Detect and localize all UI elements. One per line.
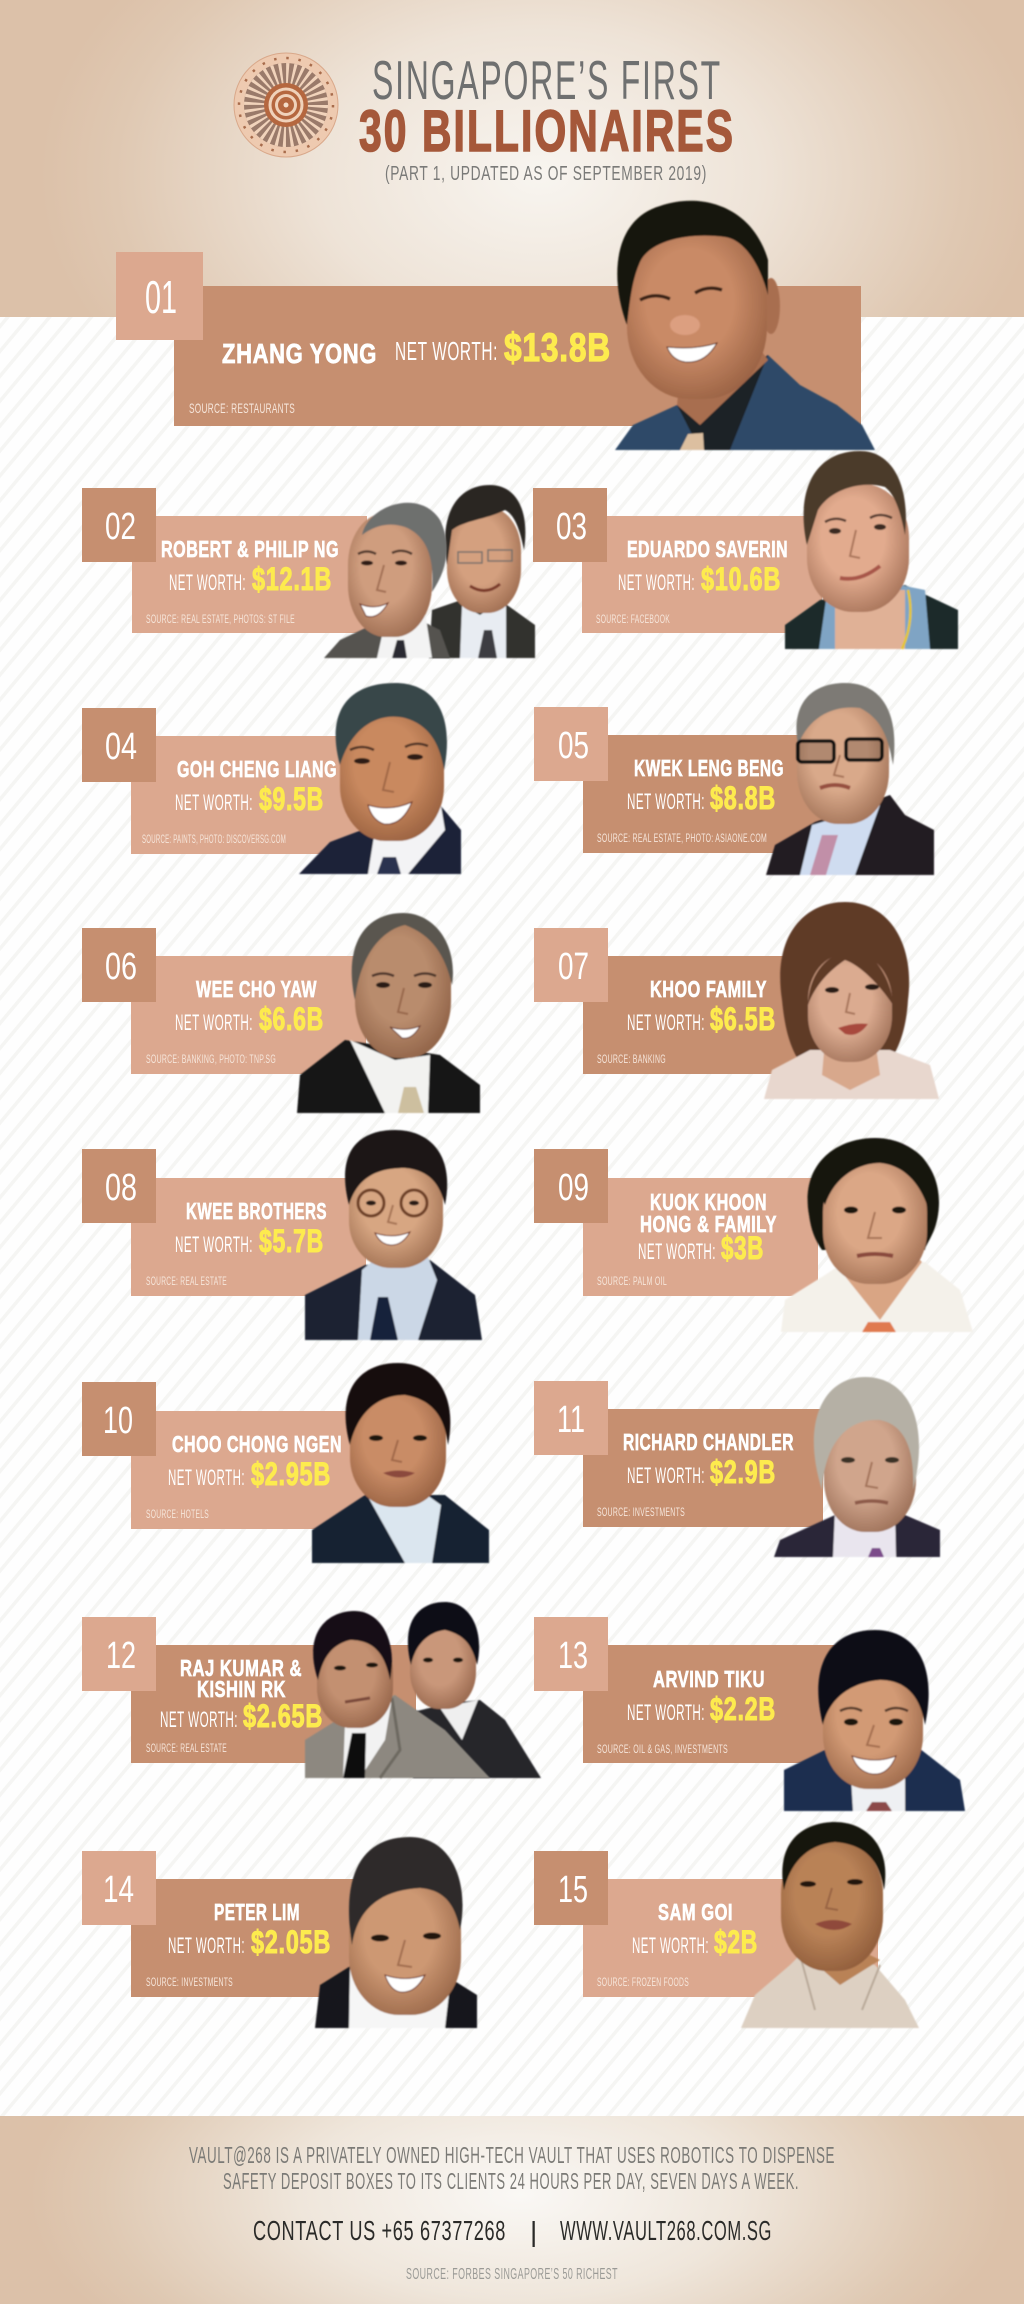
portrait: Arvind Tiku: [784, 1630, 965, 1811]
portrait: Richard Chandler: [774, 1377, 940, 1557]
portrait: Robert Ng: [324, 503, 450, 658]
source: SOURCE: REAL ESTATE: [146, 1741, 227, 1755]
source: SOURCE: RESTAURANTS: [189, 400, 295, 416]
card 01: Zhang Yong: [116, 201, 875, 450]
portrait: Kwek Leng Beng: [766, 683, 934, 875]
rank box 11: [534, 1381, 608, 1455]
rank box 02: [82, 488, 156, 562]
portrait: Goh Cheng Liang: [299, 683, 461, 874]
name: KWEE BROTHERS: [186, 1198, 327, 1224]
card 08: Kwee Brothers: [82, 1130, 482, 1340]
net worth amount: $2B: [714, 1924, 758, 1960]
source: SOURCE: BANKING, PHOTO: TNP.SG: [146, 1052, 276, 1066]
portrait: Kuok Khoon Hong: [781, 1138, 973, 1332]
net worth amount: $2.95B: [251, 1456, 331, 1492]
rank box 15: [534, 1851, 608, 1925]
rank box 14: [82, 1851, 156, 1925]
net worth amount: $2.9B: [710, 1454, 776, 1490]
net worth label: NET WORTH:: [160, 1707, 238, 1732]
net worth amount: $6.5B: [710, 1001, 776, 1037]
portrait: Philip Ng: [429, 485, 535, 658]
rank box 15: 15: [558, 1869, 588, 1911]
portrait: Zhang Yong: [615, 201, 875, 450]
rank box 12: 12: [106, 1635, 136, 1677]
net worth label: NET WORTH:: [627, 1010, 705, 1035]
net worth amount: $10.6B: [701, 561, 781, 597]
website: WWW.VAULT268.COM.SG: [560, 2215, 772, 2246]
footer panel: [0, 2116, 1024, 2304]
source: SOURCE: REAL ESTATE, PHOTO: ASIAONE.COM: [597, 831, 767, 845]
card 13: Arvind Tiku: [534, 1617, 965, 1811]
net worth amount: $2.05B: [251, 1924, 331, 1960]
portrait: Eduardo Saverin: [785, 451, 958, 649]
rank box 01: 01: [145, 271, 177, 323]
net worth label: NET WORTH:: [175, 1232, 253, 1257]
rank box 13: [534, 1617, 608, 1691]
footer description: [189, 2142, 835, 2194]
rank box 09: [534, 1149, 608, 1223]
card 14: Peter Lim: [82, 1837, 477, 2028]
net worth amount: $5.7B: [259, 1223, 324, 1259]
source: SOURCE: PALM OIL: [597, 1274, 667, 1288]
title line 1: SINGAPORE’S FIRST: [372, 49, 722, 111]
net worth label: NET WORTH:: [627, 1463, 705, 1488]
net worth label: NET WORTH:: [627, 1700, 705, 1725]
rank box 05: [534, 707, 608, 781]
name: [640, 1189, 777, 1237]
card 06: Wee Cho Yaw: [82, 913, 480, 1113]
rank box 04: [82, 708, 156, 782]
name: PETER LIM: [214, 1899, 300, 1925]
rank box 09: 09: [558, 1167, 589, 1209]
subtitle: (PART 1, UPDATED AS OF SEPTEMBER 2019): [385, 163, 707, 185]
net worth amount: $2.65B: [243, 1698, 323, 1734]
net worth amount: $9.5B: [259, 781, 324, 817]
name: SAM GOI: [658, 1899, 733, 1925]
source: SOURCE: FACEBOOK: [596, 612, 670, 626]
portrait: Choo Chong Ngen: [312, 1363, 489, 1563]
name: ZHANG YONG: [222, 338, 377, 369]
divider bar: |: [530, 2216, 537, 2247]
name: KISHIN RK: [197, 1676, 286, 1702]
name: RICHARD CHANDLER: [623, 1429, 794, 1455]
name: [180, 1655, 302, 1702]
portrait: Khoo Family: [764, 902, 939, 1099]
name: HONG & FAMILY: [640, 1211, 777, 1237]
rank box 08: 08: [105, 1167, 137, 1209]
card 03: Eduardo Saverin: [533, 451, 958, 649]
icon: vault door logo: [234, 53, 338, 157]
title line 2: 30 BILLIONAIRES: [359, 99, 735, 164]
rank box 03: [533, 488, 607, 562]
rank box 13: 13: [558, 1635, 588, 1677]
source: SOURCE: REAL ESTATE: [146, 1274, 227, 1288]
card 11: Richard Chandler: [534, 1377, 940, 1557]
name: KUOK KHOON: [650, 1189, 767, 1215]
name: RAJ KUMAR &: [180, 1655, 302, 1681]
portrait: Kwee Brothers: [305, 1130, 482, 1340]
source: SOURCE: HOTELS: [146, 1507, 209, 1521]
card 09: Kuok Khoon Hong & Family: [534, 1138, 973, 1332]
rank box 03: 03: [556, 506, 587, 548]
rank box 11: 11: [557, 1399, 585, 1441]
card 04: Goh Cheng Liang: [82, 683, 461, 874]
contact phone: CONTACT US +65 67377268: [253, 2215, 506, 2246]
name: EDUARDO SAVERIN: [627, 536, 788, 562]
rank box 06: 06: [105, 946, 137, 988]
card 05: Kwek Leng Beng: [534, 683, 934, 875]
source: SOURCE: FROZEN FOODS: [597, 1975, 689, 1989]
rank box 05: 05: [558, 725, 589, 767]
net worth label: NET WORTH:: [175, 790, 253, 815]
net worth label: NET WORTH:: [632, 1933, 709, 1958]
rank box 12: [82, 1617, 156, 1691]
rank box 06: [82, 928, 156, 1002]
portrait: Peter Lim: [315, 1837, 477, 2028]
name: KWEK LENG BENG: [634, 755, 784, 781]
net worth label: NET WORTH:: [395, 336, 498, 366]
portrait: Wee Cho Yaw: [297, 913, 480, 1113]
rank box 10: [82, 1382, 156, 1456]
card 15: Sam Goi: [534, 1822, 919, 2028]
name: CHOO CHONG NGEN: [172, 1431, 342, 1457]
source: SOURCE: REAL ESTATE, PHOTOS: ST FILE: [146, 612, 295, 626]
source: SOURCE: OIL & GAS, INVESTMENTS: [597, 1742, 728, 1756]
name: ARVIND TIKU: [653, 1666, 765, 1692]
net worth amount: $6.6B: [259, 1001, 324, 1037]
card 07: Khoo Family: [534, 902, 939, 1099]
rank box 07: 07: [558, 946, 589, 988]
card 02: Robert & Philip Ng: [82, 485, 535, 658]
name: WEE CHO YAW: [196, 976, 317, 1002]
rank box 01: [116, 252, 203, 340]
name: ROBERT & PHILIP NG: [161, 536, 339, 562]
rank box 07: [534, 928, 608, 1002]
net worth amount: $8.8B: [710, 780, 776, 816]
rank box 10: 10: [103, 1400, 133, 1442]
net worth label: NET WORTH:: [638, 1239, 716, 1264]
rank box 08: [82, 1149, 156, 1223]
net worth label: NET WORTH:: [168, 1465, 245, 1490]
card 10: Choo Chong Ngen: [82, 1363, 489, 1563]
net worth amount: $13.8B: [504, 326, 611, 370]
source: SOURCE: BANKING: [597, 1052, 666, 1066]
header panel: [0, 0, 1024, 317]
name: KHOO FAMILY: [650, 976, 767, 1002]
portrait: Sam Goi: [741, 1822, 919, 2028]
net worth label: NET WORTH:: [618, 570, 695, 595]
source: SOURCE: INVESTMENTS: [146, 1975, 233, 1989]
rank box 02: 02: [105, 506, 136, 548]
portrait: Raj Kumar: [305, 1611, 490, 1778]
rank box 04: 04: [105, 726, 137, 768]
source: SOURCE: INVESTMENTS: [597, 1505, 685, 1519]
net worth amount: $3B: [721, 1230, 764, 1266]
net worth label: NET WORTH:: [175, 1010, 253, 1035]
net worth amount: $2.2B: [710, 1691, 776, 1727]
source: SOURCE: PAINTS, PHOTO: DISCOVERSG.COM: [142, 832, 286, 846]
rank box 14: 14: [103, 1869, 134, 1911]
net worth amount: $12.1B: [252, 561, 332, 597]
net worth label: NET WORTH:: [169, 570, 246, 595]
portrait: Kishin RK: [408, 1602, 541, 1778]
data source: SOURCE: FORBES SINGAPORE’S 50 RICHEST: [406, 2266, 618, 2283]
net worth label: NET WORTH:: [168, 1933, 245, 1958]
net worth label: NET WORTH:: [627, 789, 705, 814]
name: GOH CHENG LIANG: [177, 756, 337, 782]
card 12: Raj Kumar & Kishin RK: [82, 1602, 541, 1778]
